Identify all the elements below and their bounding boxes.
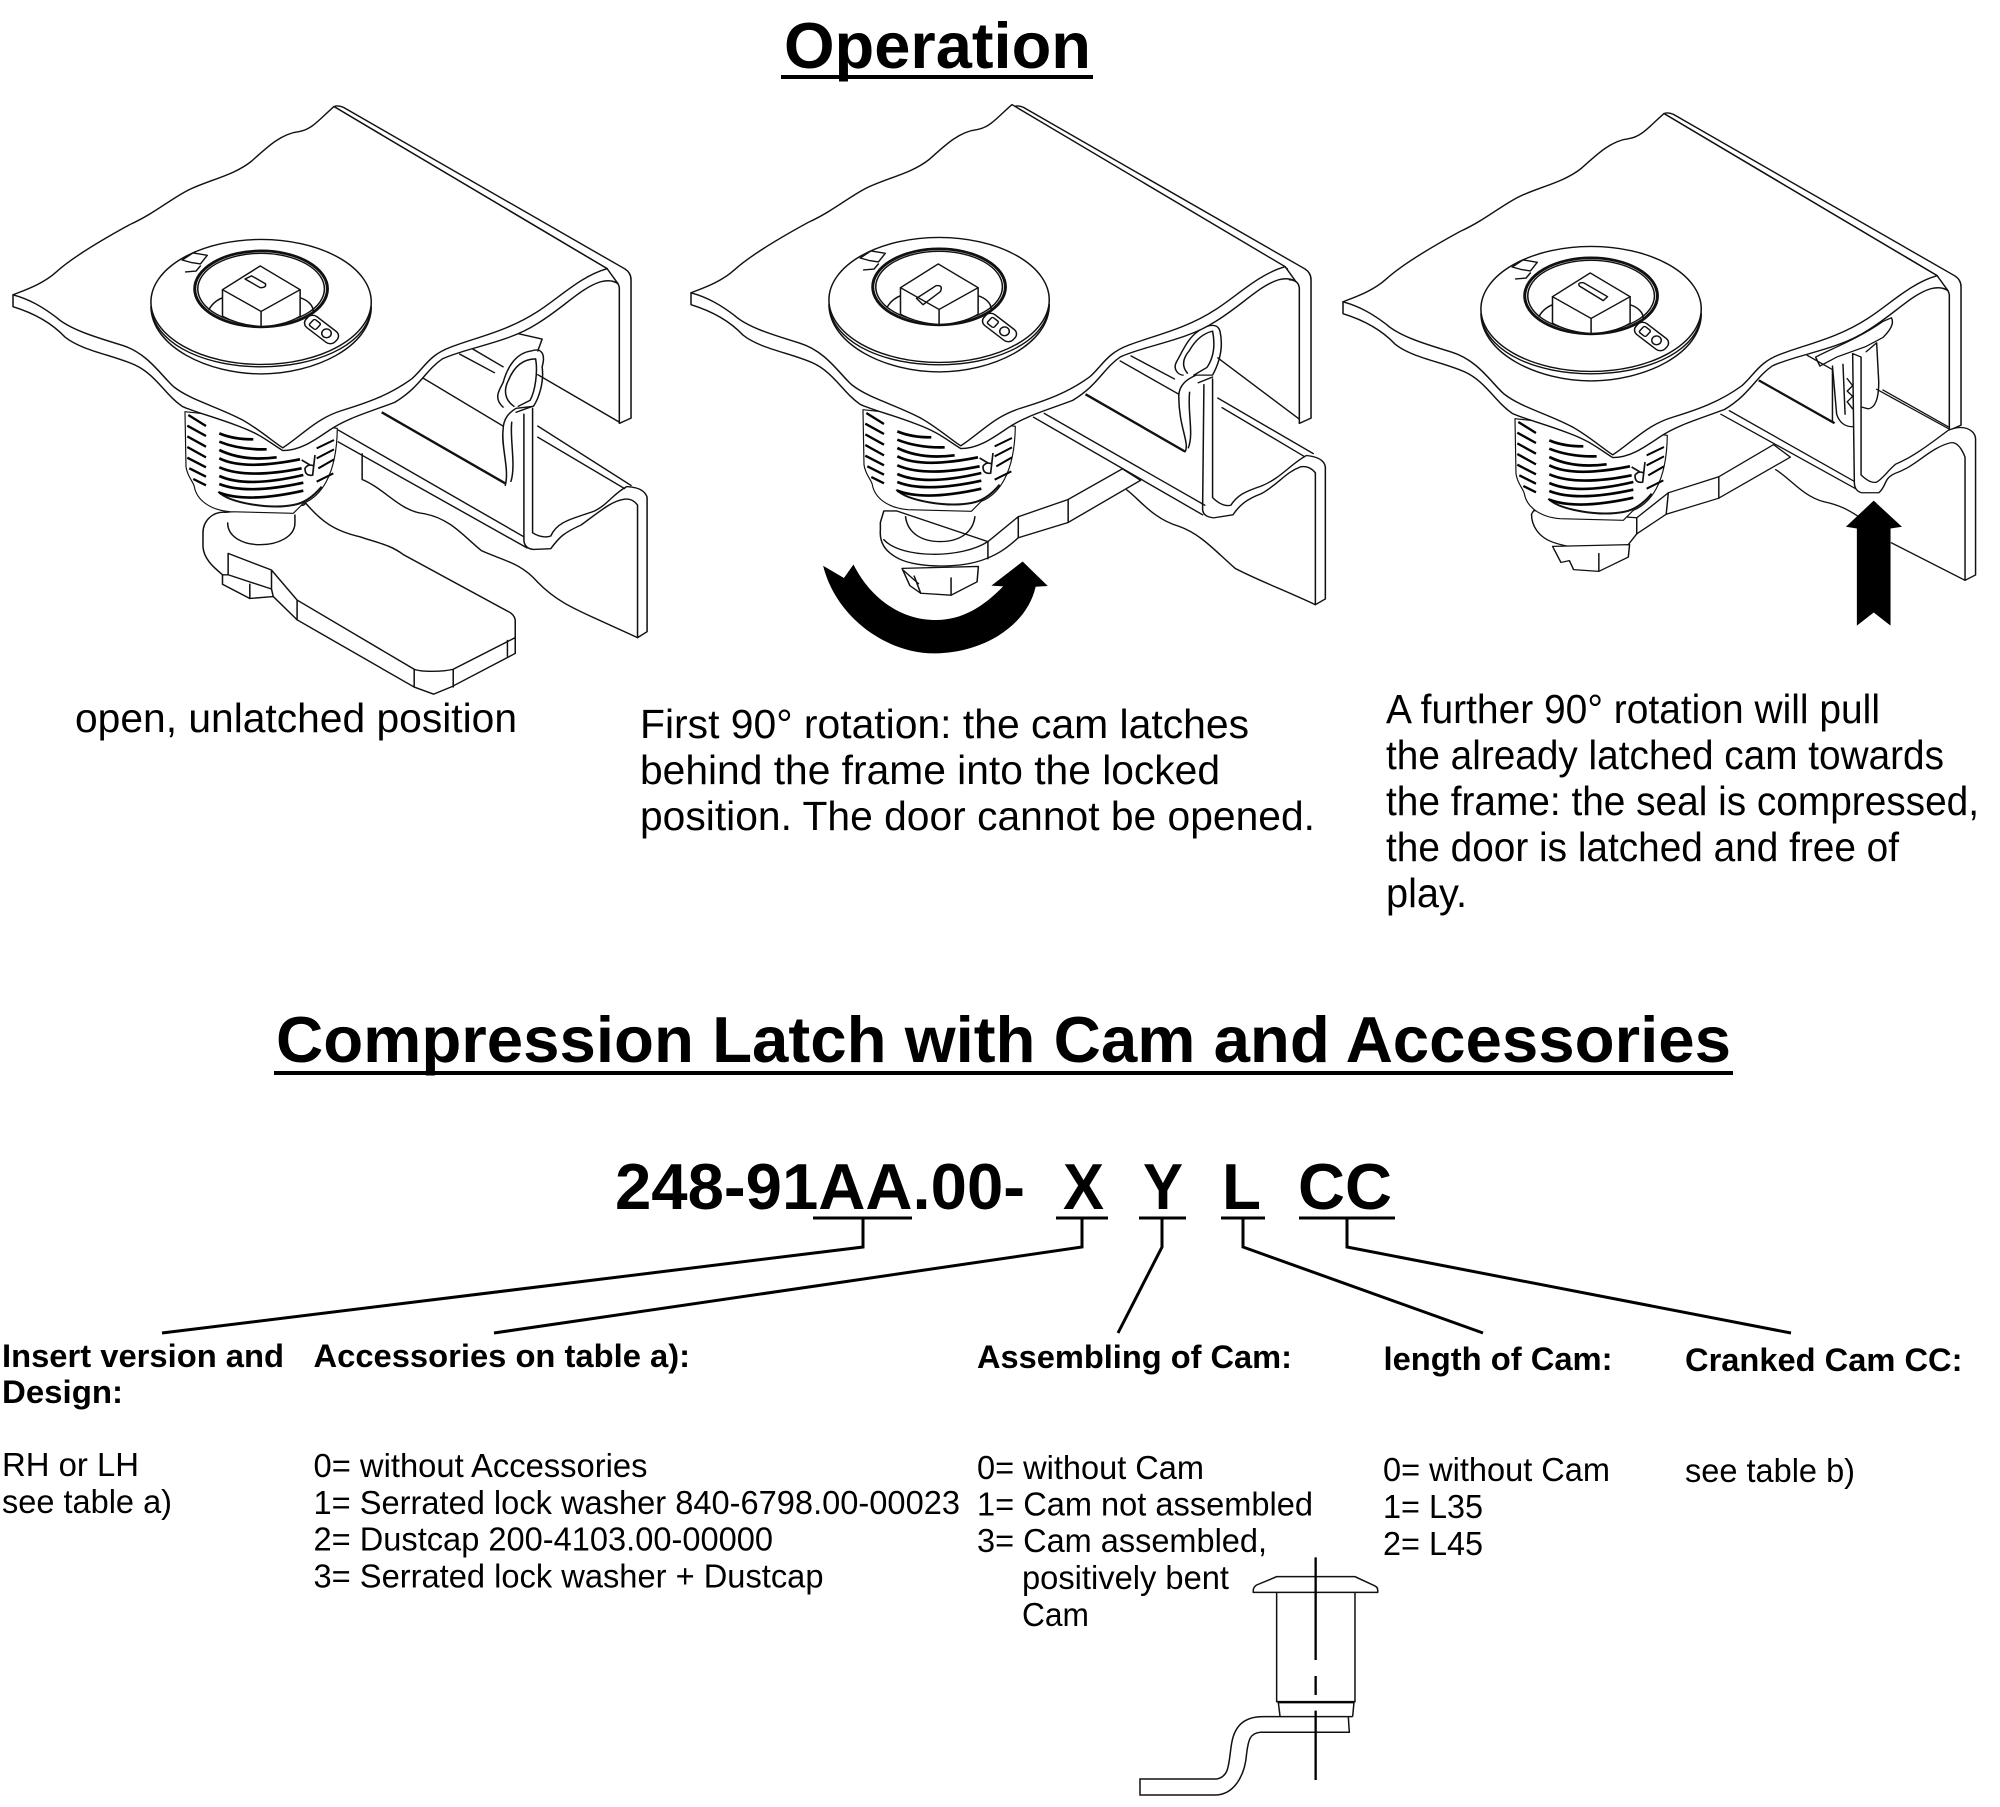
column: accessories on table a: Accessories on table a): bbox=[314, 1338, 690, 1374]
icon: key slot bbox=[917, 286, 941, 305]
panel: open, unlatched position bbox=[13, 106, 647, 741]
caption: first rotation text: behind the frame into the locked bbox=[640, 747, 1220, 793]
caption: further rotation text: play. bbox=[1386, 870, 1467, 916]
column: assembling of cam: positively bent bbox=[1022, 1559, 1229, 1596]
column: insert version and design: RH or LH bbox=[2, 1446, 139, 1483]
caption: further rotation text: the already latched cam towards bbox=[1386, 732, 1944, 778]
illustration: latch compressed position bbox=[1664, 113, 1961, 430]
caption: further rotation text: the frame: the seal is compressed, bbox=[1386, 778, 1979, 824]
column: cranked cam: Cranked Cam CC: bbox=[1685, 1342, 1962, 1378]
illustration: frame and rotated cam bbox=[880, 325, 1325, 605]
illustration: frame and pulled cam bbox=[1532, 318, 1976, 580]
column: accessories on table a: 1= Serrated lock washer 840-6798.00-00023 bbox=[314, 1484, 960, 1521]
arrow: rotation bbox=[823, 561, 1048, 653]
column: assembling of cam: 0= without Cam bbox=[977, 1449, 1204, 1486]
title: Operation: Operation bbox=[784, 9, 1091, 82]
caption: open, unlatched position: open, unlatched position bbox=[75, 695, 517, 741]
column: cranked cam bbox=[1685, 1342, 1962, 1489]
caption: first rotation text: First 90° rotation: the cam latches bbox=[640, 701, 1249, 747]
caption: further rotation text: A further 90° rotation will pull bbox=[1386, 686, 1880, 732]
column: assembling of cam: Assembling of Cam: bbox=[977, 1339, 1292, 1375]
icon: key slot bbox=[1579, 283, 1608, 301]
column: insert version and design: Design: bbox=[2, 1374, 123, 1410]
column: accessories on table a: 2= Dustcap 200-4103.00-00000 bbox=[314, 1520, 773, 1558]
arrow: pull upwards bbox=[1846, 501, 1902, 626]
column: length of cam: 0= without Cam bbox=[1383, 1451, 1610, 1488]
column: assembling of cam: 3= Cam assembled, bbox=[977, 1522, 1267, 1559]
column: accessories on table a: 0= without Accessories bbox=[314, 1447, 648, 1484]
illustration: latch in open position bbox=[203, 106, 647, 694]
caption: first rotation text bbox=[640, 701, 1315, 839]
column: length of cam: 2= L45 bbox=[1383, 1525, 1483, 1562]
part number code: 248-91AA.00- bbox=[615, 1150, 1025, 1223]
part number code bbox=[615, 1150, 1392, 1223]
part number code: CC bbox=[1298, 1150, 1392, 1223]
icon: key slot bbox=[245, 276, 266, 288]
column: length of cam: length of Cam: bbox=[1384, 1341, 1612, 1377]
illustration: latch in locked position bbox=[1014, 106, 1311, 423]
panel: first 90 degree rotation bbox=[640, 105, 1325, 839]
column: insert version and design: Insert version and bbox=[2, 1338, 284, 1374]
part number code: Y bbox=[1143, 1150, 1183, 1223]
part number code: X bbox=[1063, 1150, 1104, 1223]
column: length of cam: 1= L35 bbox=[1383, 1488, 1483, 1525]
leader lines from code to columns bbox=[162, 1218, 1791, 1333]
caption: further rotation text: the door is latched and free of bbox=[1386, 824, 1900, 870]
heading: Compression Latch with Cam and Accessories: Compression Latch with Cam and Accessories bbox=[276, 1003, 1731, 1076]
diagram: cam side view bbox=[1140, 1557, 1378, 1795]
column: insert version and design: see table a) bbox=[2, 1483, 172, 1520]
column: accessories on table a bbox=[314, 1338, 960, 1594]
column: assembling of cam: 1= Cam not assembled bbox=[977, 1486, 1313, 1522]
column: length of cam bbox=[1383, 1341, 1612, 1562]
column: accessories on table a: 3= Serrated lock washer + Dustcap bbox=[314, 1558, 824, 1594]
column: assembling of cam bbox=[977, 1339, 1313, 1633]
caption: further rotation text bbox=[1386, 686, 1979, 916]
column: assembling of cam: Cam bbox=[1022, 1596, 1089, 1633]
column: cranked cam: see table b) bbox=[1685, 1452, 1855, 1489]
caption: first rotation text: position. The door cannot be opened. bbox=[640, 793, 1315, 839]
panel: further 90 degree rotation bbox=[1343, 113, 1979, 916]
part number code: L bbox=[1222, 1150, 1261, 1223]
column: insert version and design bbox=[2, 1338, 284, 1520]
